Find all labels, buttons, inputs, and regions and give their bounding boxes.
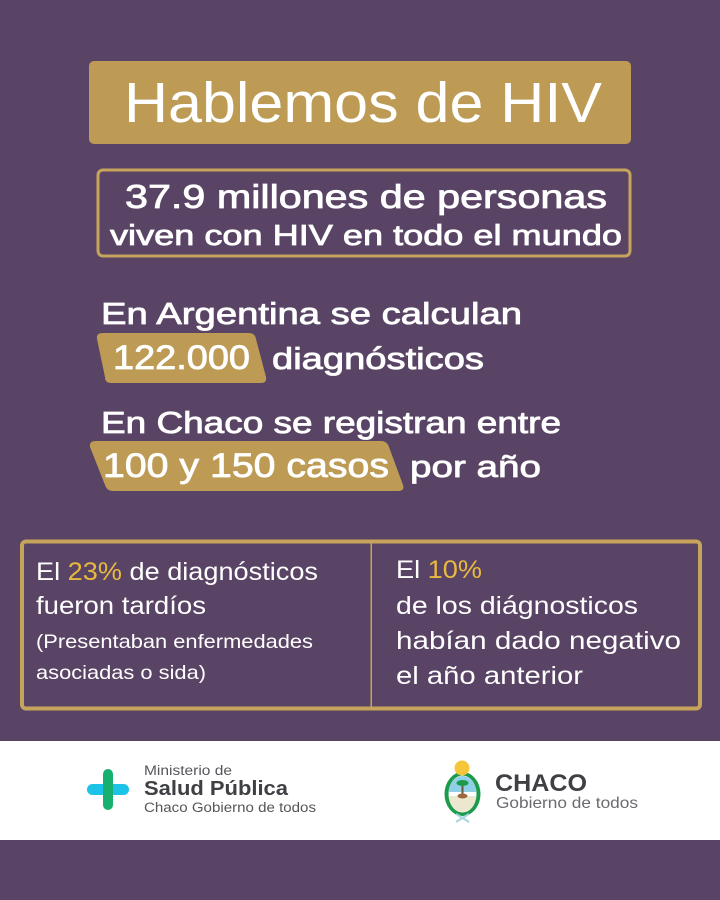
Chaco statistic: En Chaco se registran entre xyxy=(101,405,561,440)
Chaco statistic: por año xyxy=(410,449,541,484)
Argentina statistic: diagnósticos xyxy=(272,341,484,376)
footer band xyxy=(0,741,720,840)
logo text: Chaco Gobierno de todos: CHACO xyxy=(495,770,587,797)
right panel text: de los diágnosticos xyxy=(396,592,638,620)
logo text: Ministerio de Salud Pública xyxy=(144,763,316,815)
Chaco statistic xyxy=(90,405,561,491)
right panel text xyxy=(396,556,681,690)
logo text: Ministerio de Salud Pública: Salud Pública xyxy=(144,778,289,800)
right panel text: habían dado negativo xyxy=(396,627,681,655)
data panel xyxy=(22,542,700,708)
left panel text xyxy=(36,558,318,684)
logo text: Ministerio de Salud Pública: Chaco Gobierno de todos xyxy=(144,800,316,815)
global statistic box: 37.9 millones de personas xyxy=(125,178,607,215)
left panel text: asociadas o sida) xyxy=(36,662,206,684)
title banner: Hablemos de HIV xyxy=(124,71,602,135)
icon: health cross xyxy=(87,769,129,810)
left panel text: El 23% de diagnósticos xyxy=(36,558,318,586)
right panel text: El 10% xyxy=(396,556,482,584)
logo text: Chaco Gobierno de todos: Gobierno de todos xyxy=(496,795,638,812)
title banner xyxy=(89,61,631,144)
highlight: 122.000 xyxy=(97,333,266,383)
Argentina statistic: En Argentina se calculan xyxy=(101,296,522,331)
highlight: 100 y 150 casos xyxy=(90,441,403,491)
Chaco statistic: 100 y 150 casos xyxy=(103,447,389,485)
Argentina statistic: 122.000 xyxy=(113,339,250,377)
logo text: Ministerio de Salud Pública: Ministerio de xyxy=(144,763,232,778)
logo text: Chaco Gobierno de todos xyxy=(495,770,638,812)
right panel text: el año anterior xyxy=(396,662,583,690)
icon: Chaco coat of arms xyxy=(444,760,480,822)
Argentina statistic xyxy=(97,296,522,383)
global statistic box xyxy=(98,170,630,256)
left panel text: fueron tardíos xyxy=(36,592,206,620)
global statistic box: viven con HIV en todo el mundo xyxy=(110,220,622,252)
left panel text: (Presentaban enfermedades xyxy=(36,631,313,653)
